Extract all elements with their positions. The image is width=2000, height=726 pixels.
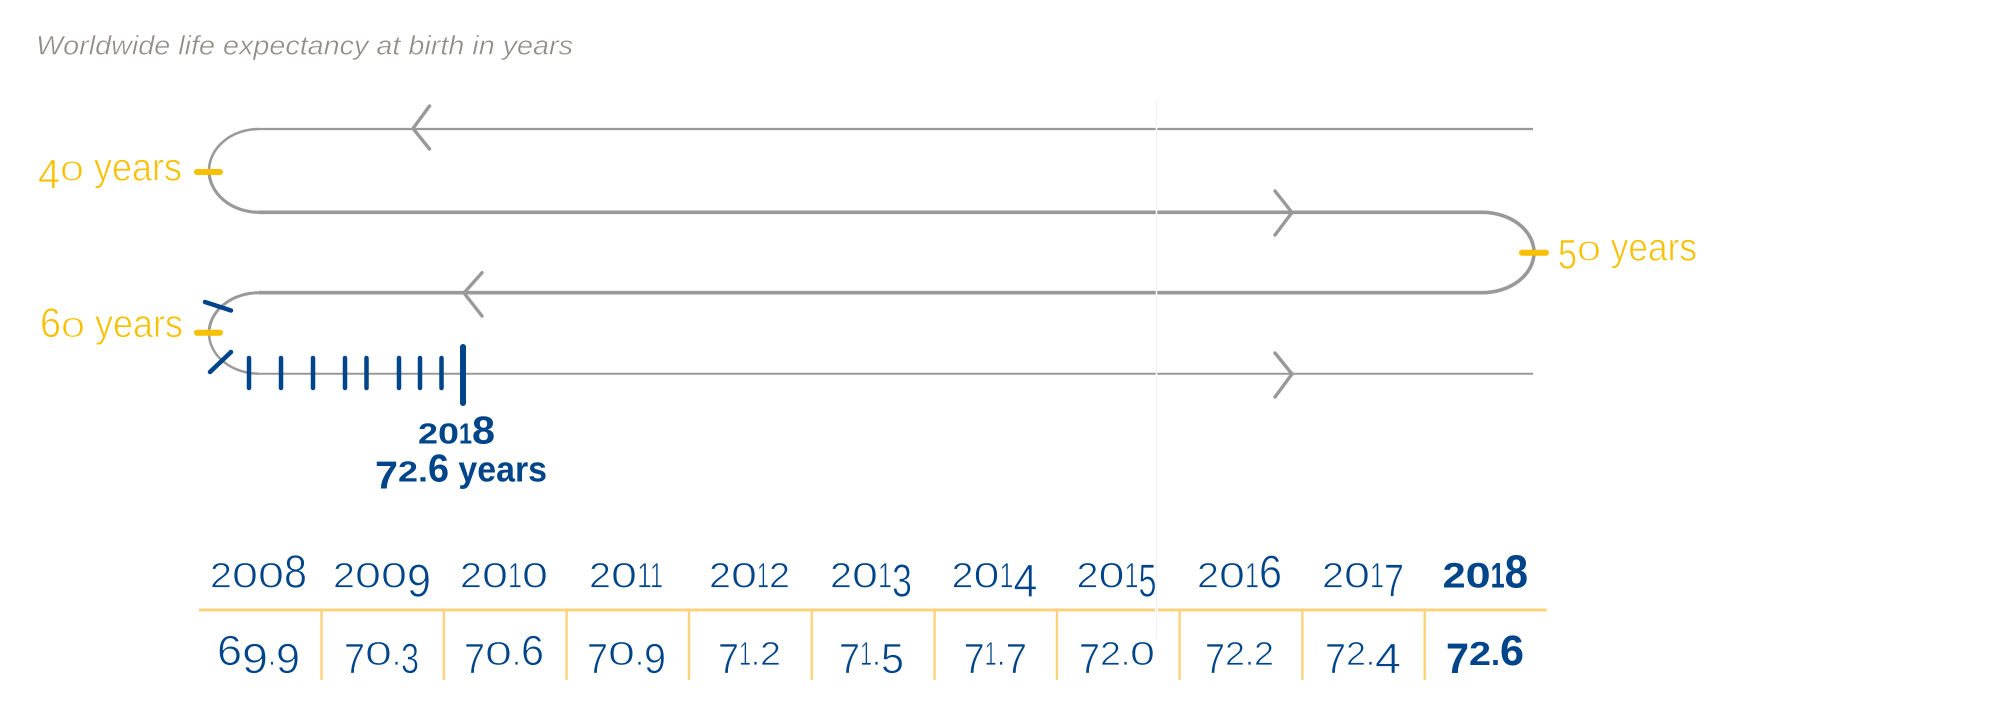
- table row: life expectancy values: 72.4: [1325, 635, 1401, 683]
- table row: years: 2014: [952, 554, 1038, 606]
- table row: years: 2010: [460, 556, 548, 596]
- callout: 2018 72.6 years: 72.6 years: [375, 448, 547, 498]
- table row: life expectancy values: 69.9: [217, 627, 300, 683]
- table row: life expectancy values: [217, 627, 1524, 683]
- arrow: fourth rightward: [1275, 353, 1292, 397]
- table row: life expectancy values: 72.2: [1205, 635, 1274, 683]
- table row: life expectancy values: 70 .9: [587, 635, 666, 683]
- table row: years: 2013: [830, 554, 912, 606]
- table row: years: 2017: [1322, 554, 1404, 606]
- marker: 50 years: 50 years: [1558, 226, 1697, 277]
- table row: years: 2009: [333, 554, 431, 606]
- table row: life expectancy values: 71.7: [964, 635, 1027, 683]
- table row: years: 2016: [1197, 546, 1282, 598]
- table row: years: 2018: [1443, 546, 1528, 598]
- callout: 2018 72.6 years: [375, 409, 547, 498]
- table row: years: 2008: [210, 546, 307, 598]
- table row: life expectancy values: 72.6: [1446, 627, 1524, 683]
- table row: life expectancy values: 72.0: [1079, 635, 1155, 683]
- table row: years: 2015: [1076, 554, 1156, 606]
- yearly ticks 2008 to 2018: [205, 302, 463, 403]
- title: Worldwide life expectancy at birth in years: [36, 30, 573, 60]
- table rules: [199, 610, 1547, 680]
- table row: life expectancy values: 71.5: [839, 635, 904, 683]
- arrow: second rightward: [1275, 191, 1292, 235]
- arrow: top leftward: [413, 106, 430, 149]
- table row: years: [210, 546, 1528, 606]
- arrow: third leftward: [464, 273, 482, 316]
- marker: 40 years: 40 years: [38, 147, 182, 198]
- marker: 60 years: 60 years: [40, 299, 183, 346]
- table row: life expectancy values: 71.2: [718, 635, 781, 683]
- table row: years: 2012: [709, 556, 790, 596]
- table row: life expectancy values: 70 .3: [344, 635, 419, 683]
- table row: years: 2011: [589, 556, 663, 596]
- faint vertical guide: [1156, 100, 1158, 638]
- table row: life expectancy values: 70 .6: [464, 627, 544, 683]
- spiral track: [209, 129, 1534, 374]
- callout: 2018 72.6 years: 2018: [418, 409, 495, 452]
